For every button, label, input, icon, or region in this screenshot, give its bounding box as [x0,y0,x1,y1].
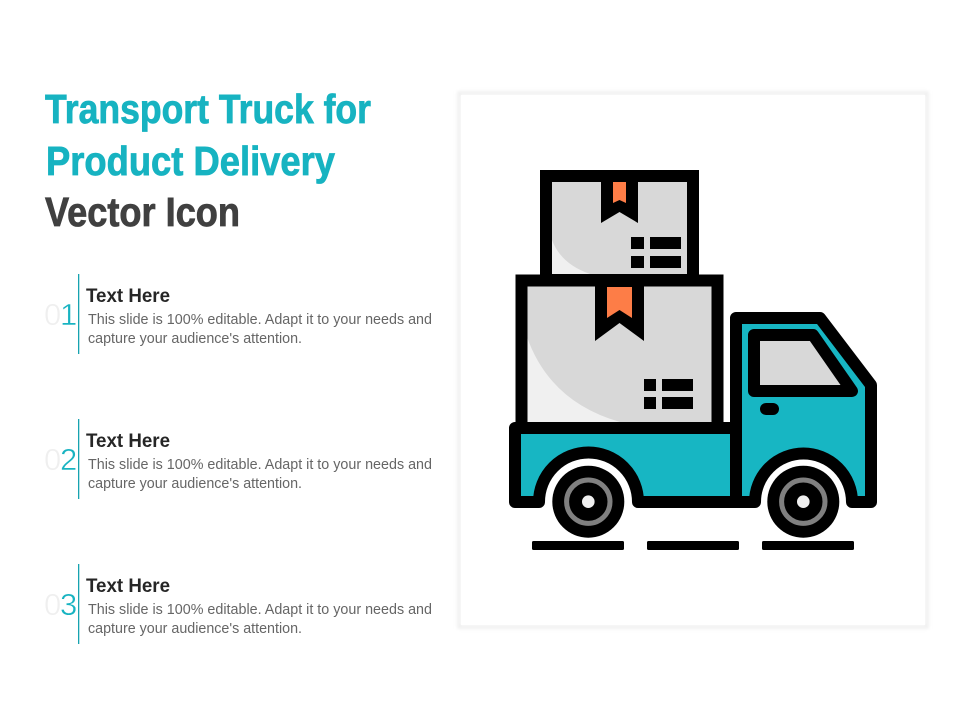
icon: cab window [754,335,852,391]
list item 1: This slide is 100% editable. Adapt it to your needs and [88,312,432,328]
icon: truck body [515,318,871,502]
icon: delivery truck with boxes [515,176,871,550]
list item 2: Text Here [86,431,170,452]
list item 2: capture your audience's attention. [88,476,302,492]
list item 1: capture your audience's attention. [88,331,302,347]
icon: rear wheel [552,466,624,538]
list item 1: 0 [44,297,61,332]
list item 3: This slide is 100% editable. Adapt it to your needs and [88,602,432,618]
panel: icon card [459,93,927,627]
list item 1: 1 [60,297,77,332]
list item 2: 2 [60,442,77,477]
list item 1: Text Here [86,286,170,307]
list item 3: Text Here [86,576,170,597]
list item 2: 0 [44,442,61,477]
list item 2: This slide is 100% editable. Adapt it to your needs and [88,457,432,473]
icon: small box [546,176,693,280]
list item 1 [44,274,432,354]
list item 3: capture your audience's attention. [88,621,302,637]
title: Product Delivery [46,138,335,184]
icon: front wheel [767,466,839,538]
icon: door handle [760,403,779,415]
list item 3: 3 [60,587,77,622]
list item 3 [44,564,432,644]
list item 3: 0 [44,587,61,622]
title: Transport Truck for [45,86,371,132]
title [45,86,371,235]
icon: large box [522,280,718,430]
cab divider [730,428,742,502]
list item 2 [44,419,432,499]
icon: road dashes [532,541,854,550]
title: Vector Icon [45,189,240,235]
